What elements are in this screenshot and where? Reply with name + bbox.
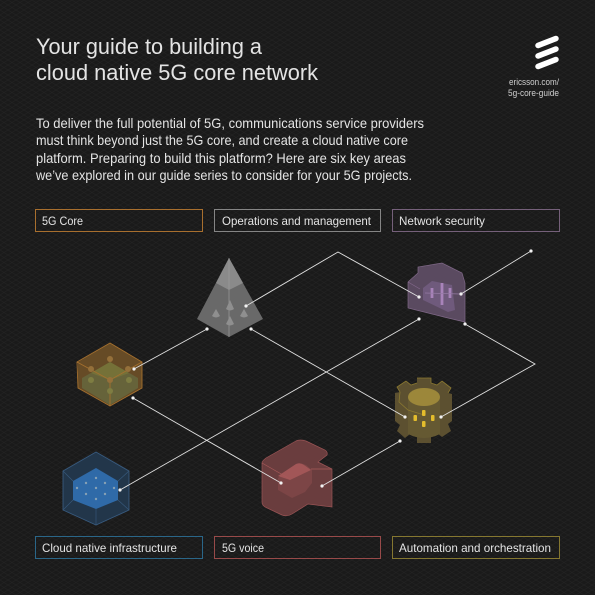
label: 5G Core	[36, 210, 202, 232]
label: Operations and management: Operations and management	[222, 214, 372, 228]
icon: block 5G voice	[262, 440, 332, 516]
link text	[508, 77, 559, 99]
icon: cube 5G core	[77, 343, 142, 406]
label: Operations and management	[214, 210, 380, 232]
label: Automation and orchestration: Automation and orchestration	[399, 541, 551, 555]
title	[36, 34, 319, 85]
icon: hexagonal cube cloud native infrastructure	[63, 452, 129, 525]
label: Cloud native infrastructure	[36, 536, 202, 558]
link text: ericsson.com/	[509, 77, 559, 88]
label: 5G voice: 5G voice	[222, 541, 264, 555]
intro text: we’ve explored in our guide series to consider for your 5G projects.	[35, 167, 412, 183]
intro text: platform. Preparing to build this platform? Here are six key areas	[36, 150, 406, 166]
label: 5G Core: 5G Core	[42, 214, 83, 228]
title: cloud native 5G core network	[36, 60, 319, 85]
label: 5G voice	[214, 536, 380, 558]
intro text: To deliver the full potential of 5G, communications service providers	[36, 115, 424, 131]
label: Automation and orchestration	[392, 536, 560, 558]
icon: shield network security	[408, 263, 465, 322]
icon: gear automation and orchestration	[395, 378, 452, 443]
icon: Ericsson logo	[538, 38, 556, 66]
link text: 5g-core-guide	[508, 88, 559, 99]
label: Network security	[392, 210, 560, 232]
title: Your guide to building a	[36, 34, 262, 59]
intro text	[35, 115, 424, 183]
connector end dots	[118, 249, 533, 492]
label: Cloud native infrastructure: Cloud native infrastructure	[42, 541, 177, 555]
icon: pyramid operations and management	[197, 258, 263, 337]
label: Network security: Network security	[399, 214, 485, 228]
connector lines	[120, 251, 535, 490]
intro text: must think beyond just the 5G core, and create a cloud native core	[36, 132, 408, 148]
